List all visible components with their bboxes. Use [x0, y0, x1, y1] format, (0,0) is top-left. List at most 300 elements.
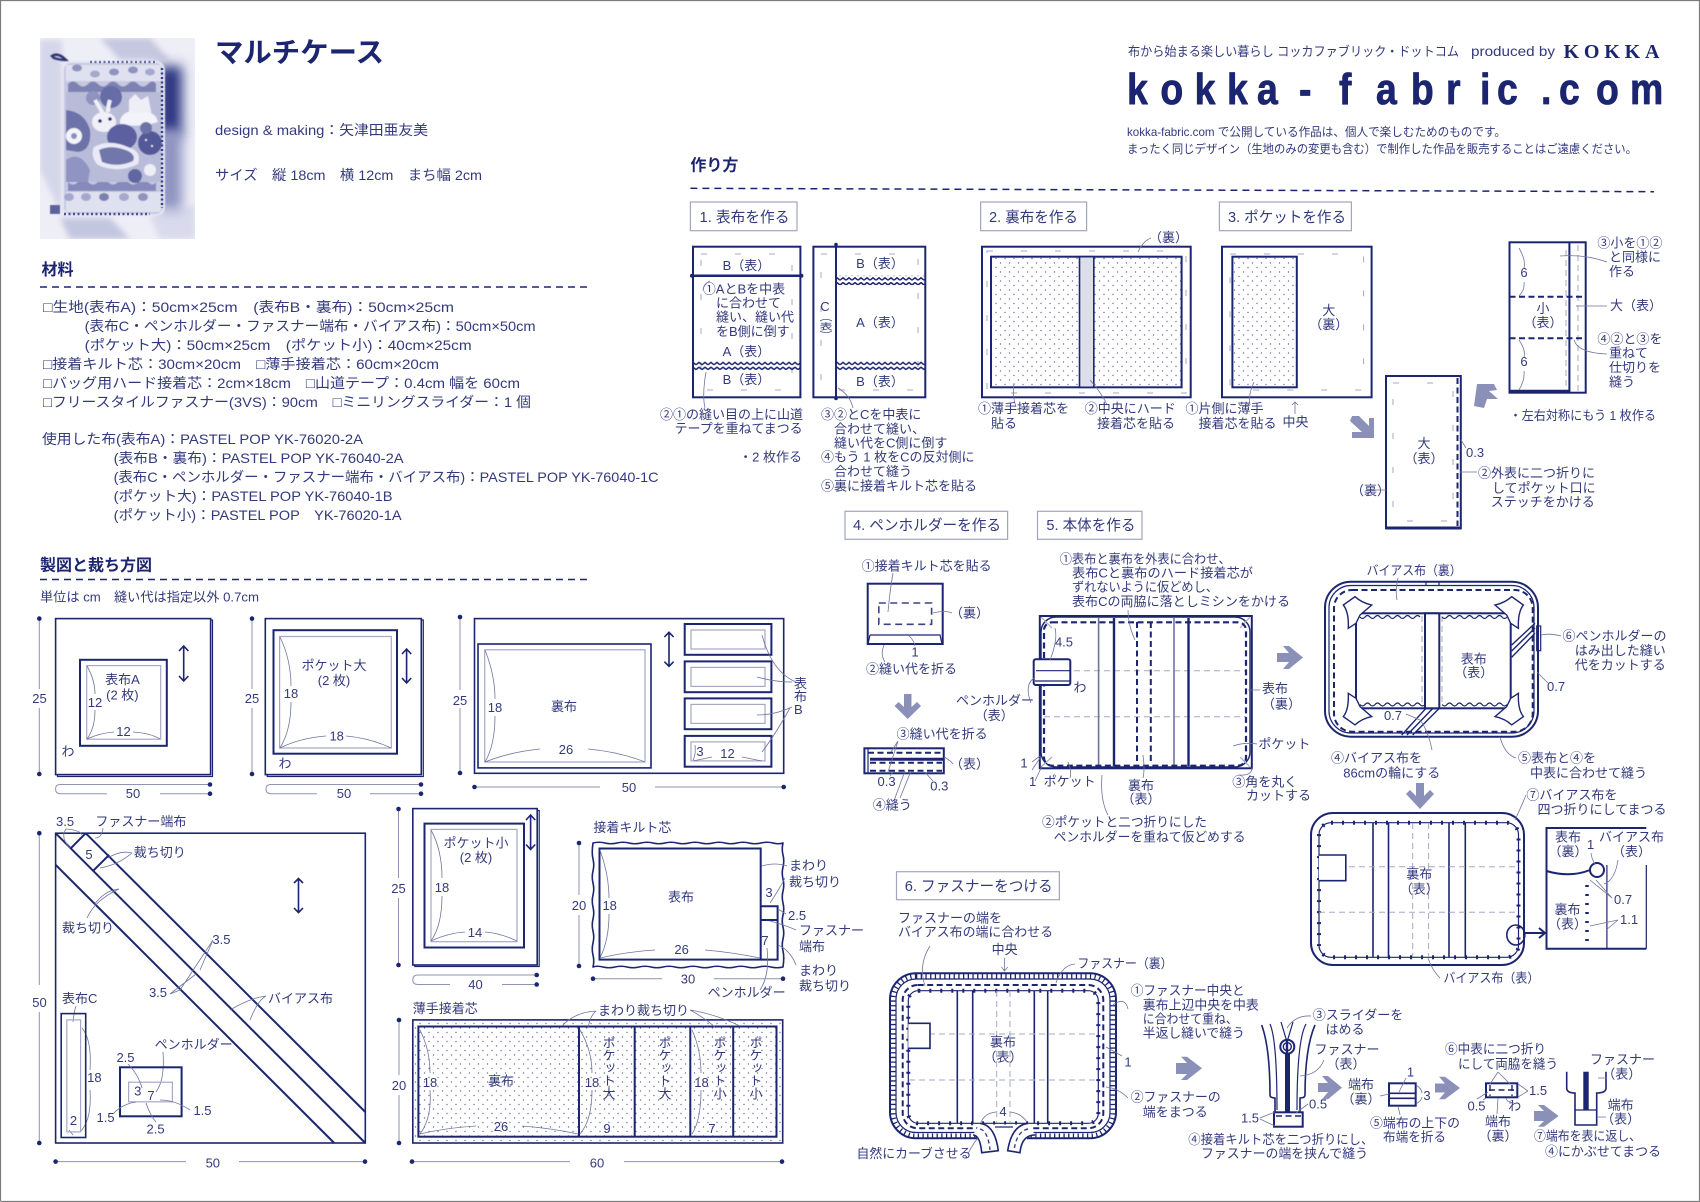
cutting diagram: lining and outer fabric B: 3	[696, 744, 704, 759]
cutting diagram: thin fusible interfacing: 18	[423, 1075, 437, 1090]
step 3 folded pocket	[1351, 376, 1596, 528]
detail of bias binding: 表布	[1555, 830, 1581, 845]
cutting diagram: fusible quilt batting: ファスナー	[799, 923, 864, 938]
cutting diagram: lining and outer fabric B: 表	[794, 676, 807, 691]
step 6 main diagram: 中央	[992, 942, 1018, 957]
step 6 end fabric fold: ⑤端布の上下の	[1370, 1115, 1460, 1130]
materials list: (ポケット大)：50cm×25cm (ポケット小)：40cm×25cm	[85, 337, 472, 353]
step 5 body assembly	[956, 610, 1311, 845]
cutting diagram: thin fusible interfacing: 18	[694, 1075, 709, 1090]
arrow: to folded pocket	[1350, 416, 1374, 438]
step 3 folded pocket: 大	[1417, 436, 1431, 451]
cutting diagram: lining and outer fabric B: 18	[488, 700, 502, 715]
cutting diagram: fusible quilt batting: 端布	[799, 939, 825, 954]
title: マルチケース	[215, 37, 384, 68]
step 4 pen holder sewn: （表）	[950, 756, 989, 771]
cutting diagram: lining and outer fabric B: B	[794, 702, 803, 717]
step 6 main diagram: 1	[1124, 1055, 1132, 1070]
cutting diagram: fusible quilt batting: 26	[674, 942, 689, 957]
step 6 heading box	[896, 872, 1059, 900]
cutting diagram: thin fusible interfacing: ポケット小	[712, 1036, 726, 1101]
step 6 main diagram: 裏布上辺中央を中表	[1143, 997, 1259, 1012]
step 3 pocket assembly: 小	[1536, 301, 1550, 316]
step 5 heading box: 5. 本体を作る	[1046, 517, 1135, 534]
step 1 left panel	[690, 247, 803, 408]
step 6 main diagram: バイアス布の端に合わせる	[898, 925, 1053, 940]
cutting diagram: bias and fastener-end fabric: バイアス布	[268, 991, 333, 1006]
step 4 pen holder top view: ②縫い代を折る	[866, 661, 957, 676]
cutting diagram: thin fusible interfacing: ポケット小	[748, 1036, 762, 1101]
step 3 folded pocket: ②外表に二つ折りに	[1478, 466, 1595, 481]
step 5 heading box	[1038, 511, 1142, 539]
arrow: to zipper	[1176, 1057, 1202, 1080]
step 2 diagram: （裏）	[1149, 230, 1188, 245]
fabrics used: (ポケット大)：PASTEL POP YK-76040-1B	[114, 488, 393, 504]
cutting diagram: thin fusible interfacing: 26	[494, 1119, 508, 1134]
arrow: to pocket with divider	[1474, 384, 1498, 408]
cutting diagram: small pocket: (2 枚)	[460, 850, 492, 865]
step 5: bias binding sewn: 中表に合わせて縫う	[1530, 766, 1647, 781]
step 6 zipper detail: （表）	[1326, 1056, 1366, 1071]
cutting diagram: small pocket: 25	[391, 881, 406, 896]
site logo: kokka-fabric.com	[1127, 64, 1663, 114]
arrow: right to bias	[1277, 646, 1303, 669]
cutting diagram: bias and fastener-end fabric: 3.5	[149, 985, 167, 1000]
step 6 end fabric fold: （裏）	[1341, 1092, 1381, 1106]
step 3 pocket assembly: ③小を①②	[1597, 235, 1662, 250]
cutting diagram: fusible quilt batting: まわり	[799, 963, 838, 978]
step 4 pen holder top view: ①接着キルト芯を貼る	[862, 559, 992, 574]
step 6 end fabric finished: ④にかぶせてまつる	[1545, 1144, 1661, 1159]
step 1 left panel: B（表）	[723, 258, 770, 273]
cutting diagram: large pocket: わ	[278, 756, 292, 771]
cutting diagram: bias and fastener-end fabric: 1.5	[97, 1110, 115, 1125]
step 1 left panel: をB側に倒す	[716, 324, 790, 339]
fabrics used: (ポケット小)：PASTEL POP YK-76020-1A	[114, 507, 402, 523]
step 1 captions: ④もう 1 枚をCの反対側に	[821, 450, 974, 465]
cutting diagram: fusible quilt batting: 20	[572, 898, 586, 913]
step 5 body assembly: （裏）	[1262, 696, 1301, 711]
cutting diagram: bias and fastener-end fabric: 3.5	[56, 814, 74, 829]
cutting diagram: thin fusible interfacing: まわり裁ち切り	[598, 1003, 689, 1018]
materials list	[43, 299, 536, 410]
cutting diagram: bias and fastener-end fabric: 裁ち切り	[134, 845, 186, 860]
step 6 end fabric sewn: 端布	[1485, 1114, 1511, 1129]
cutting diagram: outer fabric A: 12	[116, 724, 131, 739]
step 6 end fabric finished: ⑦端布を表に返し、	[1534, 1129, 1641, 1144]
step 1 right panel: （表）	[818, 313, 832, 339]
step 4 pen holder sewn: ③縫い代を折る	[897, 726, 988, 741]
step 5 body assembly: ポケット	[1258, 736, 1310, 751]
cutting diagram: fusible quilt batting: 表布	[668, 890, 694, 904]
cutting diagram: fusible quilt batting: 2.5	[788, 908, 806, 923]
step 5 captions top: 表布Cの両脇に落としミシンをかける	[1072, 594, 1290, 609]
fabrics used	[42, 431, 659, 523]
step 6 zipper detail: ファスナー	[1314, 1042, 1380, 1057]
step 5: bias finished: （表）	[1400, 882, 1439, 896]
step 5 body assembly: 1	[1020, 756, 1028, 771]
step 5: bias finished: バイアス布（表）	[1443, 971, 1539, 986]
step 5: bias binding sewn: ④バイアス布を	[1331, 751, 1422, 766]
cutting diagram: outer fabric A: 25	[32, 691, 47, 706]
step 1 heading box: 1. 表布を作る	[700, 209, 790, 226]
step 1 captions: ・2 枚作る	[739, 450, 802, 465]
cutting diagram: lining and outer fabric B	[453, 615, 807, 795]
site tagline: produced by	[1471, 43, 1555, 59]
cutting diagram: large pocket: 18	[329, 728, 344, 744]
step 3 pocket assembly: と同様に	[1609, 250, 1661, 265]
cutting diagram: thin fusible interfacing: 裏布	[488, 1074, 514, 1088]
step 3 pocket assembly: ・左右対称にもう 1 枚作る	[1510, 408, 1656, 423]
step 2 heading box: 2. 裏布を作る	[989, 209, 1078, 226]
cutting diagram: bias and fastener-end fabric: 50	[206, 1156, 220, 1170]
step 3 pocket lining panel: 大	[1322, 303, 1335, 318]
step 4 pen holder top view: 1	[911, 645, 919, 660]
step 5: bias finished: 四つ折りにしてまつる	[1538, 802, 1666, 817]
step 3 pocket lining panel: ①片側に薄手	[1186, 401, 1264, 416]
detail of bias binding: 裏布	[1554, 902, 1581, 917]
step 6 zipper detail	[1188, 1007, 1403, 1161]
header: how to make: 作り方	[690, 156, 738, 174]
cutting diagram: thin fusible interfacing: 薄手接着芯	[413, 1001, 478, 1016]
cutting diagram: thin fusible interfacing: 20	[392, 1078, 406, 1093]
step 6 main diagram: （表）	[983, 1050, 1023, 1065]
cutting diagram: lining and outer fabric B: 12	[720, 746, 735, 761]
step 5 body assembly: 4.5	[1055, 635, 1073, 650]
step 6 end fabric sewn: （裏）	[1478, 1128, 1518, 1144]
cutting diagram: bias and fastener-end fabric: 7	[147, 1088, 155, 1103]
cutting diagram: fusible quilt batting: まわり	[789, 858, 828, 873]
step 4: pen holder	[845, 511, 1008, 812]
step 3 folded pocket: してポケット口に	[1492, 481, 1596, 496]
cutting diagram: bias and fastener-end fabric: 1.5	[193, 1103, 212, 1118]
cutting diagram: fusible quilt batting: 7	[761, 933, 769, 948]
step 6 main diagram: ファスナーの端を	[898, 911, 1002, 926]
cutting diagram: thin fusible interfacing	[392, 1001, 784, 1170]
step 2 captions: 接着芯を貼る	[1097, 416, 1175, 431]
step 3 pocket assembly	[1510, 235, 1662, 423]
step 1 right panel: C	[820, 299, 830, 314]
step 1 captions: ②①の縫い目の上に山道	[660, 407, 803, 422]
step 1 right panel	[813, 243, 925, 408]
step 3 pocket assembly: 縫う	[1609, 375, 1635, 390]
step 1 left panel: に合わせて	[716, 296, 781, 311]
step 5 body assembly: ポケット	[1044, 774, 1096, 789]
step 5 body assembly: わ	[1073, 680, 1087, 695]
cutting diagram: fusible quilt batting	[572, 820, 864, 1000]
step 3 heading box: 3. ポケットを作る	[1228, 209, 1346, 226]
step 6 main diagram: 裏布	[990, 1035, 1016, 1050]
cutting diagram: outer fabric A: わ	[61, 744, 75, 759]
step 1 captions: テープを重ねてまつる	[675, 421, 803, 436]
step 6 main diagram: ファスナー（裏）	[1078, 956, 1172, 971]
step 4 heading box	[845, 511, 1008, 539]
step 5 captions top	[1060, 551, 1290, 609]
step 4 pen holder sewn: 0.3	[878, 774, 896, 789]
cutting diagram: bias and fastener-end fabric: 18	[87, 1070, 102, 1085]
cutting diagram: thin fusible interfacing: ポケット大	[600, 1036, 616, 1100]
step 5 body assembly: ②ポケットと二つ折りにした	[1042, 815, 1207, 830]
step 3 pocket assembly: 6	[1520, 354, 1528, 369]
cutting diagram: bias and fastener-end fabric: 表布C	[62, 991, 97, 1006]
header: pattern and cutting layout: 製図と裁ち方図	[40, 556, 152, 574]
step 5: bias binding sewn: ⑥ペンホルダーの	[1562, 629, 1667, 644]
step 5 body assembly: カットする	[1246, 788, 1311, 803]
cutting diagram: large pocket: ポケット大	[301, 658, 367, 673]
step 3 pocket assembly: （表）	[1523, 315, 1563, 330]
step 1 captions: 合わせて縫う	[834, 464, 912, 479]
step 5 body assembly: ペンホルダーを重ねて仮どめする	[1054, 830, 1246, 845]
step 5: bias finished	[1311, 787, 1666, 986]
step 1 captions: ⑤裏に接着キルト芯を貼る	[821, 478, 977, 493]
step 6 end fabric sewn	[1445, 1041, 1558, 1144]
step 6 main diagram: 4	[999, 1104, 1007, 1119]
cutting diagram: lining and outer fabric B: 裏布	[551, 699, 577, 714]
step 3 pocket lining panel: 中央	[1282, 414, 1309, 430]
detail of bias binding: 0.7	[1614, 892, 1632, 907]
step 4 pen holder sewn	[864, 726, 989, 812]
step 6: fastener	[856, 872, 1661, 1161]
step 6 zipper detail: ファスナーの端を挟んで縫う	[1201, 1146, 1368, 1161]
cutting diagram: bias and fastener-end fabric: ペンホルダー	[155, 1037, 233, 1052]
step 2 captions: 貼る	[991, 416, 1017, 431]
step 6 main diagram: に合わせて重ね、	[1143, 1011, 1238, 1026]
step 3 pocket assembly: ④②と③を	[1597, 331, 1662, 346]
cutting diagram: small pocket: 40	[468, 977, 483, 992]
step 5 body assembly: ペンホルダー	[956, 693, 1034, 708]
step 1 captions	[660, 407, 977, 493]
step 6 end fabric fold	[1341, 1065, 1460, 1145]
cutting diagram: lining and outer fabric B: 50	[622, 780, 636, 795]
step 1 captions: 縫い代をC側に倒す	[834, 435, 947, 450]
step 6 end fabric fold: 布端を折る	[1383, 1130, 1446, 1145]
cutting diagram: outer fabric A: 50	[126, 786, 140, 801]
step 6 end fabric fold: 3	[1423, 1088, 1431, 1103]
cutting diagram: bias and fastener-end fabric: ファスナー端布	[95, 814, 186, 829]
step 6 end fabric finished: ファスナー	[1590, 1052, 1655, 1067]
materials list: (表布C・ペンホルダー・ファスナー端布・バイアス布)：50cm×50cm	[85, 318, 536, 334]
cutting diagram: bias and fastener-end fabric: 2.5	[147, 1122, 165, 1136]
cutting diagram: outer fabric A: 12	[88, 695, 102, 710]
step 3 heading box	[1219, 202, 1351, 231]
cutting diagram: small pocket: ポケット小	[443, 836, 509, 850]
cutting diagram: lining and outer fabric B: 26	[559, 742, 573, 757]
step 1 captions: 合わせて縫い、	[834, 421, 925, 436]
size text: サイズ 縦 18cm 横 12cm まち幅 2cm	[215, 167, 482, 183]
step 5: bias binding sewn: 0.7	[1384, 708, 1402, 723]
step 6 zipper detail: はめる	[1326, 1022, 1365, 1037]
step 5 captions top: ①表布と裏布を外表に合わせ、	[1060, 551, 1231, 566]
usage notice: kokka-fabric.com で公開している作品は、個人で楽しむためのものです。	[1127, 125, 1506, 139]
step 3 pocket lining panel: （裏）	[1309, 317, 1348, 332]
step 3 pocket assembly: 仕切りを	[1609, 360, 1661, 375]
step 6 main diagram	[856, 911, 1259, 1161]
step 3 folded pocket: （表）	[1404, 451, 1444, 466]
cutting diagram: bias and fastener-end fabric	[32, 814, 367, 1170]
step 1 right panel: B（表）	[856, 374, 904, 389]
cutting diagram: thin fusible interfacing: 9	[603, 1121, 611, 1136]
cutting diagram: thin fusible interfacing: 60	[590, 1156, 604, 1170]
step 3 pocket lining panel	[1186, 247, 1372, 431]
step 5: bias finished: 裏布	[1406, 866, 1432, 882]
detail of bias binding	[1546, 828, 1664, 949]
step 3: pocket	[1186, 202, 1662, 528]
cutting diagram: fusible quilt batting: 3	[765, 885, 773, 900]
step 1 captions: ③②とCを中表に	[821, 407, 921, 422]
step 2 captions	[978, 401, 1176, 431]
cutting diagram: thin fusible interfacing: 7	[708, 1121, 716, 1136]
detail of bias binding: バイアス布	[1599, 830, 1664, 845]
detail of bias binding: （裏）	[1548, 844, 1588, 859]
step 1 left panel: 縫い、縫い代	[716, 310, 794, 325]
units note: 単位は cm 縫い代は指定以外 0.7cm	[40, 590, 259, 604]
step 3 pocket assembly: 6	[1520, 265, 1528, 280]
step 5 body assembly: 裏布	[1128, 778, 1154, 793]
step 5: bias binding sewn: 代をカットする	[1575, 657, 1666, 672]
cutting diagram: outer fabric A: (2 枚)	[106, 688, 139, 702]
materials list: □バッグ用ハード接着芯：2cm×18cm □山道テープ：0.4cm 幅を 60cm	[43, 375, 520, 391]
cutting diagram: large pocket: 18	[284, 686, 298, 701]
step 6 end fabric sewn: 1.5	[1529, 1083, 1547, 1098]
cutting diagram: large pocket: 25	[245, 691, 259, 706]
step 4 pen holder sewn: ④縫う	[873, 797, 912, 812]
step 1 right panel: B（表）	[856, 256, 904, 271]
step 6 end fabric sewn: わ	[1508, 1099, 1521, 1114]
cutting diagram: small pocket: 14	[468, 925, 482, 940]
detail of bias binding: （表）	[1612, 844, 1651, 859]
step 6 main diagram: ①ファスナー中央と	[1131, 983, 1245, 998]
step 5: bias binding sewn: 86cmの輪にする	[1343, 766, 1440, 781]
detail of bias binding: 1.1	[1620, 912, 1638, 927]
step 3 pocket lining panel: 接着芯を貼る	[1198, 416, 1277, 431]
step 6 end fabric sewn: ⑥中表に二つ折り	[1445, 1041, 1546, 1056]
cutting diagram: thin fusible interfacing: 18	[585, 1075, 599, 1090]
step 6 heading box: 6. ファスナーをつける	[905, 878, 1053, 895]
step 6 zipper detail: 1.5	[1241, 1111, 1259, 1126]
site tagline	[1128, 41, 1660, 63]
fabrics used: (表布C・ペンホルダー・ファスナー端布・バイアス布)：PASTEL POP YK-76040-1C	[114, 469, 659, 485]
cutting diagram: fusible quilt batting: 裁ち切り	[799, 978, 851, 994]
header: how to make	[690, 156, 1654, 192]
step 6 end fabric fold: 端布	[1348, 1077, 1374, 1092]
cutting diagram: outer fabric A: 表布A	[105, 672, 140, 687]
step 5 body assembly: （表）	[975, 708, 1014, 723]
arrow: down	[894, 694, 921, 719]
step 6 main diagram: 自然にカーブさせる	[856, 1146, 972, 1161]
cutting diagram: bias and fastener-end fabric: 裁ち切り	[62, 920, 114, 936]
step 5: bias finished: ⑦バイアス布を	[1526, 787, 1617, 802]
cutting diagram: bias and fastener-end fabric: 50	[32, 995, 47, 1010]
step 4 pen holder top view	[862, 559, 992, 676]
materials list: □フリースタイルファスナー(3VS)：90cm □ミニリングスライダー：1 個	[43, 394, 531, 410]
step 2 diagram	[982, 230, 1191, 407]
cutting diagram: small pocket: 18	[435, 880, 449, 895]
step 3 pocket assembly: 作る	[1609, 264, 1635, 279]
materials list: □生地(表布A)：50cm×25cm (表布B・裏布)：50cm×25cm	[43, 299, 454, 315]
step 6 end fabric sewn: にして両脇を縫う	[1458, 1056, 1558, 1071]
step 6 end fabric finished: （表）	[1601, 1112, 1640, 1126]
site tagline: 布から始まる楽しい暮らし コッカファブリック・ドットコム	[1128, 44, 1459, 59]
step 6 main diagram: 端をまつる	[1143, 1105, 1208, 1120]
fabrics used: (表布B・裏布)：PASTEL POP YK-76040-2A	[114, 450, 404, 466]
step 6 end fabric fold: 1	[1407, 1065, 1414, 1080]
arrow: down to finished	[1406, 783, 1434, 809]
step 6 zipper detail: ④接着キルト芯を二つ折りにし、	[1188, 1132, 1373, 1147]
usage notice	[1127, 125, 1637, 156]
step 2 captions: ②中央にハード	[1085, 401, 1176, 416]
cutting diagram: fusible quilt batting: 接着キルト芯	[593, 820, 671, 835]
photo: finished multi case	[40, 38, 195, 239]
step 1 left panel: ①AとBを中表	[703, 281, 785, 296]
step 1 right panel: A（表）	[856, 315, 904, 330]
step 5: bias binding sewn: バイアス布（裏）	[1367, 563, 1462, 578]
cutting diagram: large pocket: 50	[337, 786, 351, 801]
cutting diagram: bias and fastener-end fabric: 5	[85, 847, 93, 862]
step 5: bias binding sewn: はみ出した縫い	[1575, 643, 1666, 658]
step 4 pen holder sewn: 0.3	[930, 779, 948, 794]
step 6 end fabric finished: （表）	[1602, 1066, 1641, 1082]
cutting diagram: bias and fastener-end fabric: 3	[134, 1084, 141, 1098]
cutting diagram: fusible quilt batting: 18	[602, 898, 617, 913]
step 5: body	[956, 511, 1311, 845]
cutting diagram: outer fabric A	[32, 616, 212, 801]
header: materials: 材料	[42, 260, 74, 279]
cutting diagram: bias and fastener-end fabric: 2	[70, 1113, 77, 1128]
arrow: to end fabric	[1318, 1076, 1342, 1099]
step 2: lining	[978, 202, 1191, 431]
cutting diagram: lining and outer fabric B: 布	[794, 689, 807, 704]
step 6 zipper detail: 0.5	[1309, 1096, 1327, 1111]
step 6 main diagram: 半返し縫いで縫う	[1143, 1026, 1245, 1041]
step 1 left panel: B（表）	[723, 372, 770, 387]
arrow: to final	[1534, 1105, 1559, 1127]
cutting diagram: fusible quilt batting: 裁ち切り	[789, 874, 841, 890]
cutting diagram: bias and fastener-end fabric: 2.5	[116, 1050, 135, 1065]
step 5 body assembly: 表布	[1262, 681, 1288, 696]
step 4 pen holder top view: （裏）	[950, 605, 989, 620]
step 5: bias binding sewn: 0.7	[1547, 679, 1565, 694]
step 6 end fabric sewn: 0.5	[1467, 1099, 1486, 1114]
step 6 main diagram: ②ファスナーの	[1131, 1090, 1221, 1105]
step 5: bias binding sewn: 表布	[1461, 651, 1487, 666]
designer credit: design & making：矢津田亜友美	[215, 122, 428, 138]
cutting diagram: fusible quilt batting: 30	[681, 972, 695, 986]
step 3 folded pocket: 0.3	[1466, 445, 1484, 460]
step 5: bias binding sewn: ⑤表布と④を	[1518, 751, 1596, 766]
cutting diagram: small pocket	[391, 807, 539, 992]
step 2 heading box	[981, 202, 1087, 231]
step 2 captions: ①薄手接着芯を	[978, 401, 1069, 416]
site tagline: KOKKA	[1564, 41, 1660, 63]
cutting diagram: thin fusible interfacing: ポケット大	[656, 1036, 672, 1100]
step 3 pocket assembly: 重ねて	[1609, 345, 1648, 360]
cutting diagram: lining and outer fabric B: 25	[453, 693, 467, 708]
step 5: bias binding sewn	[1325, 563, 1667, 781]
step 5 body assembly: 1	[1029, 774, 1036, 789]
step 1: outer fabric	[660, 202, 977, 493]
step 6 end fabric finished: 端布	[1608, 1098, 1634, 1112]
step 6 end fabric finished	[1534, 1052, 1661, 1159]
cutting diagram: large pocket: (2 枚)	[318, 673, 350, 688]
step 5 body assembly: （表）	[1121, 792, 1161, 806]
step 5 body assembly: ③角を丸く	[1232, 775, 1297, 790]
materials list: □接着キルト芯：30cm×20cm □薄手接着芯：60cm×20cm	[43, 356, 439, 372]
step 1 left panel: A（表）	[723, 344, 770, 359]
step 5: bias binding sewn: （表）	[1454, 665, 1493, 680]
cutting diagram: fusible quilt batting: ペンホルダー	[708, 985, 786, 1000]
arrow: to sewn end fabric	[1435, 1077, 1460, 1099]
step 1 heading box	[690, 202, 797, 231]
